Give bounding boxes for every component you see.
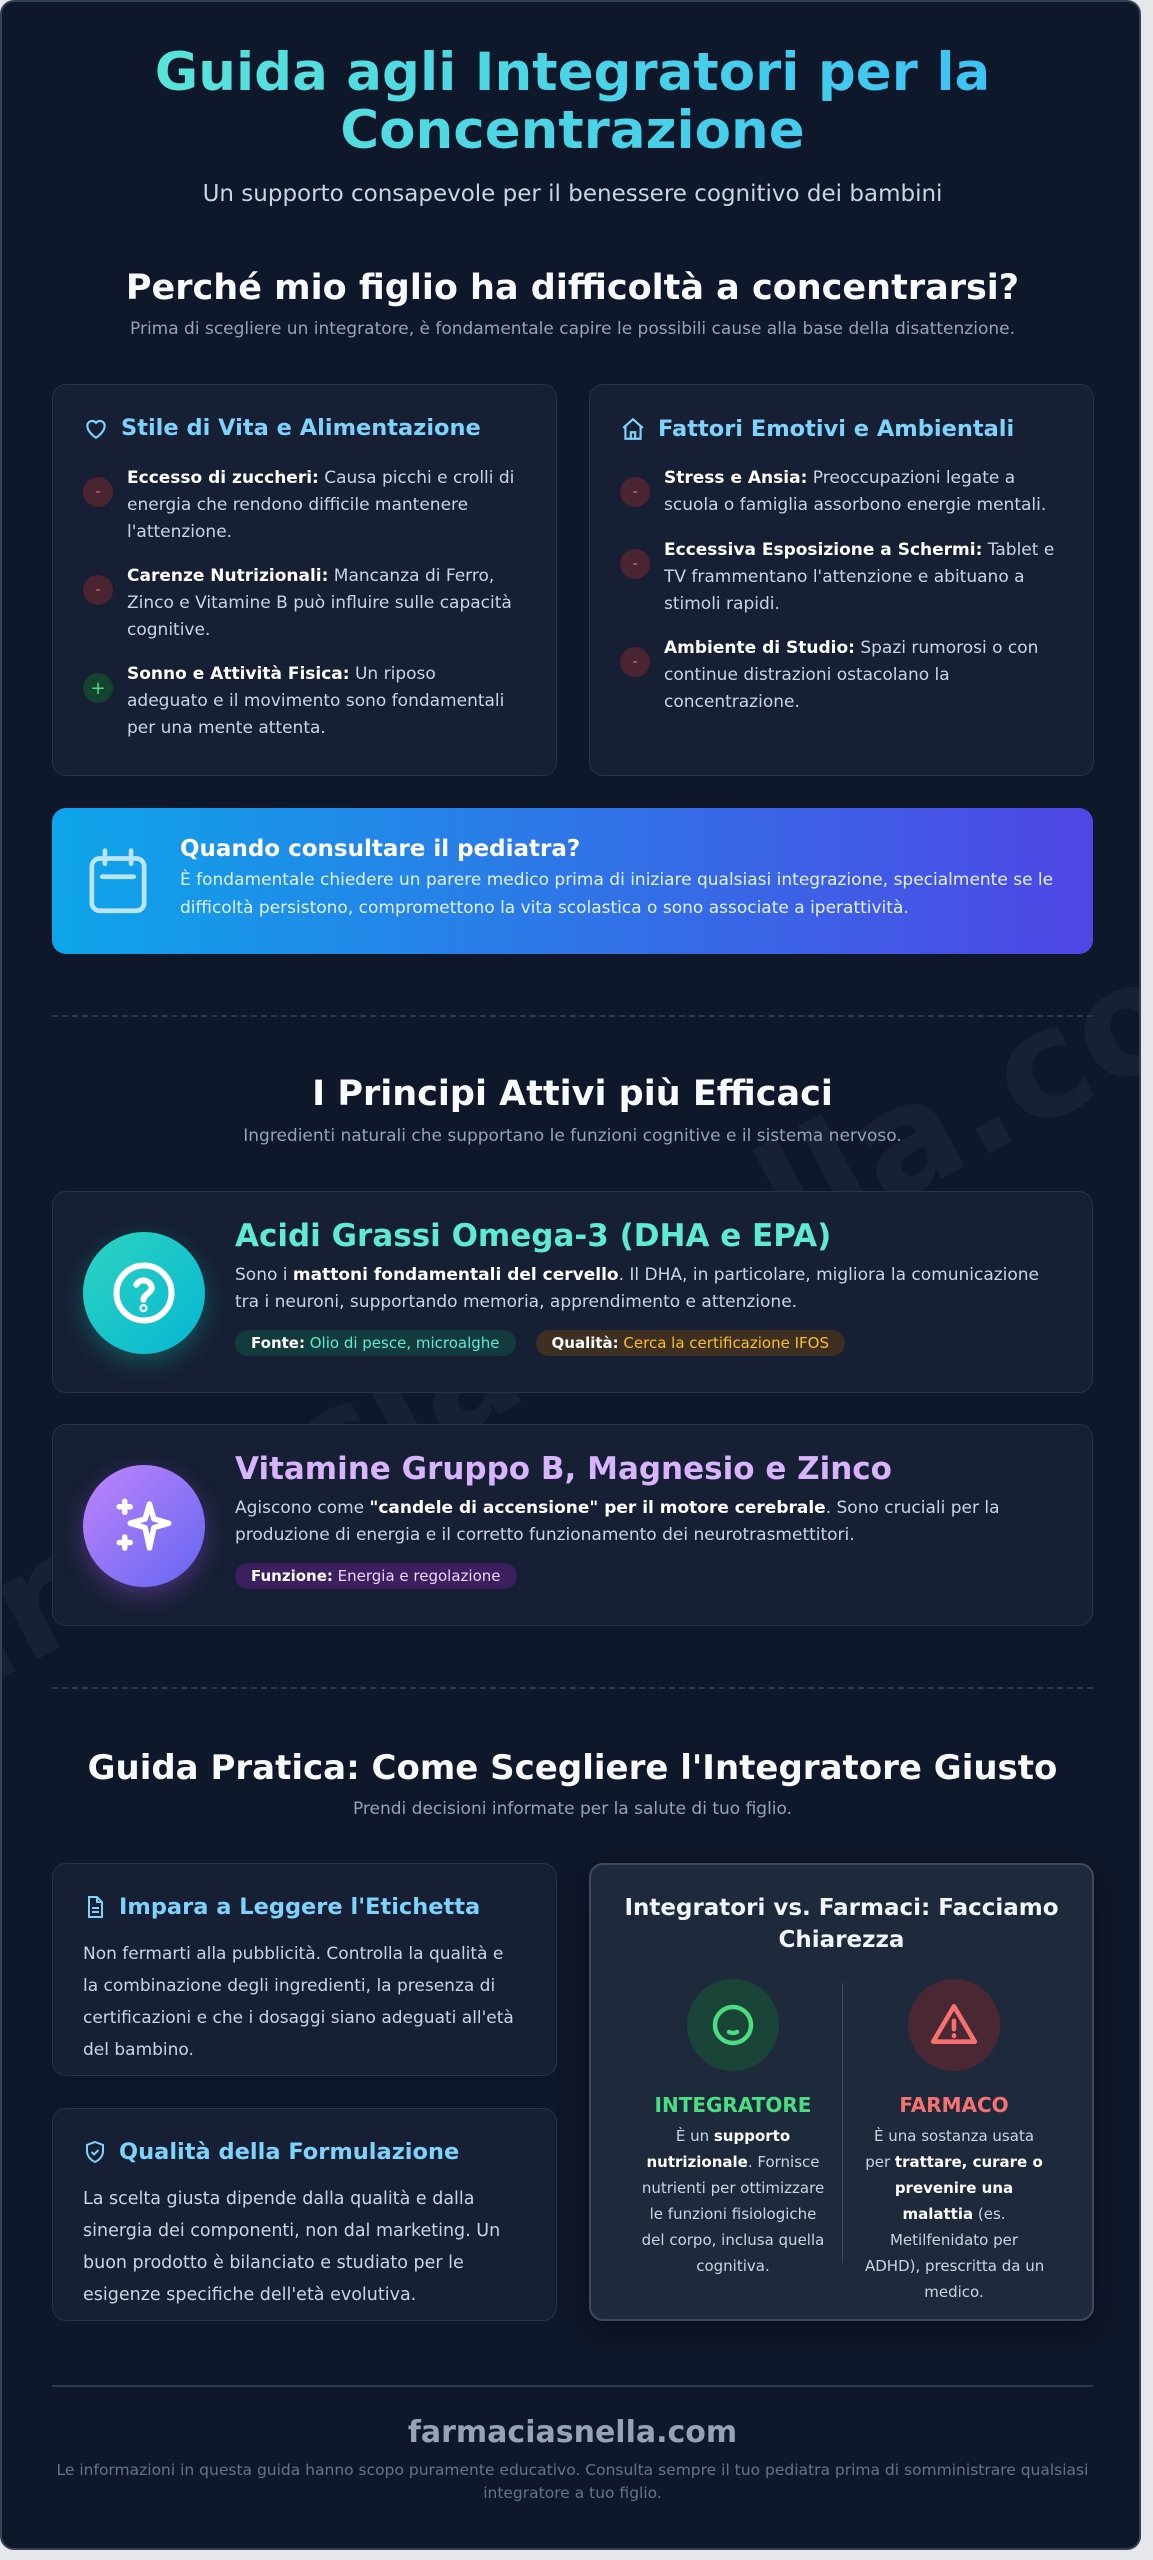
subtitle: Un supporto consapevole per il benessere cognitivo dei bambini bbox=[203, 181, 942, 207]
footer brand: farmaciasnella.com bbox=[408, 2415, 737, 2450]
panel heading: lifestyle: Stile di Vita e Alimentazione bbox=[121, 415, 481, 441]
omega text: Sono i mattoni fondamentali del cervello. Il DHA, in particolare, migliora la comunicazione tra i neuroni, supportando memoria, apprendimento e attenzione. bbox=[235, 1265, 1039, 1312]
panel: etichetta bbox=[52, 1863, 557, 2076]
footer disclaimer: Le informazioni in questa guida hanno scopo puramente educativo. Consulta sempre il tuo pediatra prima di somministrare qualsiasi integratore a tuo figlio. bbox=[57, 2461, 1088, 2502]
icon: omega bbox=[83, 1232, 205, 1354]
item: zuccheri: Eccesso di zuccheri: Causa picchi e crolli di energia che rendono difficile mantenere l'attenzione. bbox=[127, 468, 514, 542]
callout text bbox=[180, 836, 1053, 918]
icon: calendar bbox=[90, 848, 146, 914]
item: schermi: Eccessiva Esposizione a Schermi: Tablet e TV frammentano l'attenzione e abituano a stimoli rapidi. bbox=[664, 540, 1054, 614]
column: integratore: INTEGRATORE bbox=[655, 2093, 811, 2117]
icon: warning bbox=[908, 1979, 1000, 2071]
panel: lifestyle bbox=[52, 384, 557, 776]
column: farmaco: È una sostanza usata per trattare, curare o prevenire una malattia (es. Metilfenidato per ADHD), prescritta da un medico. bbox=[865, 2127, 1044, 2301]
panel heading: emotional: Fattori Emotivi e Ambientali bbox=[658, 416, 1014, 442]
heading: cause: Perché mio figlio ha difficoltà a concentrarsi? bbox=[126, 268, 1019, 308]
item: zuccheri: - bbox=[95, 484, 101, 500]
heading: vs: Integratori vs. Farmaci: Facciamo Chiarezza bbox=[624, 1895, 1059, 1953]
item: sonno: Sonno e Attività Fisica: Un riposo bbox=[127, 664, 436, 684]
subheading: guida pratica: Prendi decisioni informate per la salute di tuo figlio. bbox=[353, 1799, 792, 1819]
callout text: È fondamentale chiedere un parere medico prima di iniziare qualsiasi integrazione, specialmente se le difficoltà persistono, compromettono la vita scolastica o sono associate a iperattività. bbox=[180, 870, 1053, 918]
callout: pediatra bbox=[52, 808, 1093, 954]
omega text: Acidi Grassi Omega-3 (DHA e EPA) bbox=[235, 1218, 831, 1254]
vitamine text: Vitamine Gruppo B, Magnesio e Zinco bbox=[235, 1451, 892, 1487]
heading: etichetta: Impara a Leggere l'Etichetta bbox=[119, 1894, 480, 1920]
item: sonno: adeguato e il movimento sono fondamentali per una mente attenta. bbox=[127, 691, 504, 738]
column: integratore: È un supporto nutrizionale. Fornisce nutrienti per ottimizzare le funzioni fisiologiche del corpo, inclusa quella cognitiva. bbox=[642, 2127, 824, 2275]
subheading: cause: Prima di scegliere un integratore, è fondamentale capire le possibili cause alla base della disattenzione. bbox=[130, 319, 1015, 339]
column: farmaco bbox=[865, 1979, 1044, 2301]
column: integratore bbox=[642, 1979, 824, 2275]
item: schermi: - bbox=[632, 556, 638, 572]
item: ambiente: - bbox=[632, 654, 638, 670]
item: stress: Stress e Ansia: Preoccupazioni legate a scuola o famiglia assorbono energie mentali. bbox=[664, 468, 1046, 515]
panel: formulazione bbox=[52, 2108, 557, 2321]
item: stress: - bbox=[632, 484, 638, 500]
title: Guida agli Integratori per la bbox=[155, 42, 990, 103]
item: sonno bbox=[83, 664, 504, 738]
title bbox=[2, 44, 1143, 160]
panel: omega-3 bbox=[52, 1191, 1093, 1393]
heading: guida pratica: Guida Pratica: Come Scegliere l'Integratore Giusto bbox=[88, 1748, 1057, 1788]
text: etichetta: Non fermarti alla pubblicità. Controlla la qualità e la combinazione degli ingredienti, la presenza di certificazioni e che i dosaggi siano adeguati all'età del bambino. bbox=[83, 1944, 514, 2060]
item: sonno: + bbox=[90, 678, 106, 698]
panel: integratori vs farmaci bbox=[589, 1863, 1094, 2321]
subheading: principi: Ingredienti naturali che supportano le funzioni cognitive e il sistema nervoso. bbox=[243, 1126, 902, 1146]
icon: sparkles bbox=[83, 1465, 205, 1587]
title: Concentrazione bbox=[340, 100, 805, 161]
callout text: Quando consultare il pediatra? bbox=[180, 836, 580, 862]
heading: principi: I Principi Attivi più Efficaci bbox=[312, 1074, 833, 1114]
item: ambiente: Ambiente di Studio: Spazi rumorosi o con continue distrazioni ostacolano la concentrazione. bbox=[664, 638, 1038, 712]
heading: formulazione: Qualità della Formulazione bbox=[119, 2139, 459, 2165]
vitamine text: Agiscono come "candele di accensione" per il motore cerebrale. Sono cruciali per la produzione di energia e il corretto funzionamento dei neurotrasmettitori. bbox=[235, 1498, 1000, 1545]
panel: vitamine bbox=[52, 1424, 1093, 1626]
panel: emotional bbox=[589, 384, 1094, 776]
item: carenze: Carenze Nutrizionali: Mancanza di Ferro, Zinco e Vitamine B può influire sulle capacità cognitive. bbox=[127, 566, 512, 640]
item: carenze: - bbox=[95, 582, 101, 598]
text: formulazione: La scelta giusta dipende dalla qualità e dalla sinergia dei componenti, non dal marketing. Un buon prodotto è bilanciato e studiato per le esigenze specifiche dell'età evolutiva. bbox=[83, 2189, 500, 2305]
omega text bbox=[235, 1218, 1039, 1356]
omega text: Qualità: Cerca la certificazione IFOS bbox=[552, 1334, 829, 1352]
vitamine text bbox=[235, 1451, 1000, 1589]
icon: smile bbox=[687, 1979, 779, 2071]
vitamine text: Funzione: Energia e regolazione bbox=[251, 1567, 500, 1585]
omega text: Fonte: Olio di pesce, microalghe bbox=[251, 1334, 500, 1352]
column: farmaco: FARMACO bbox=[899, 2093, 1009, 2117]
